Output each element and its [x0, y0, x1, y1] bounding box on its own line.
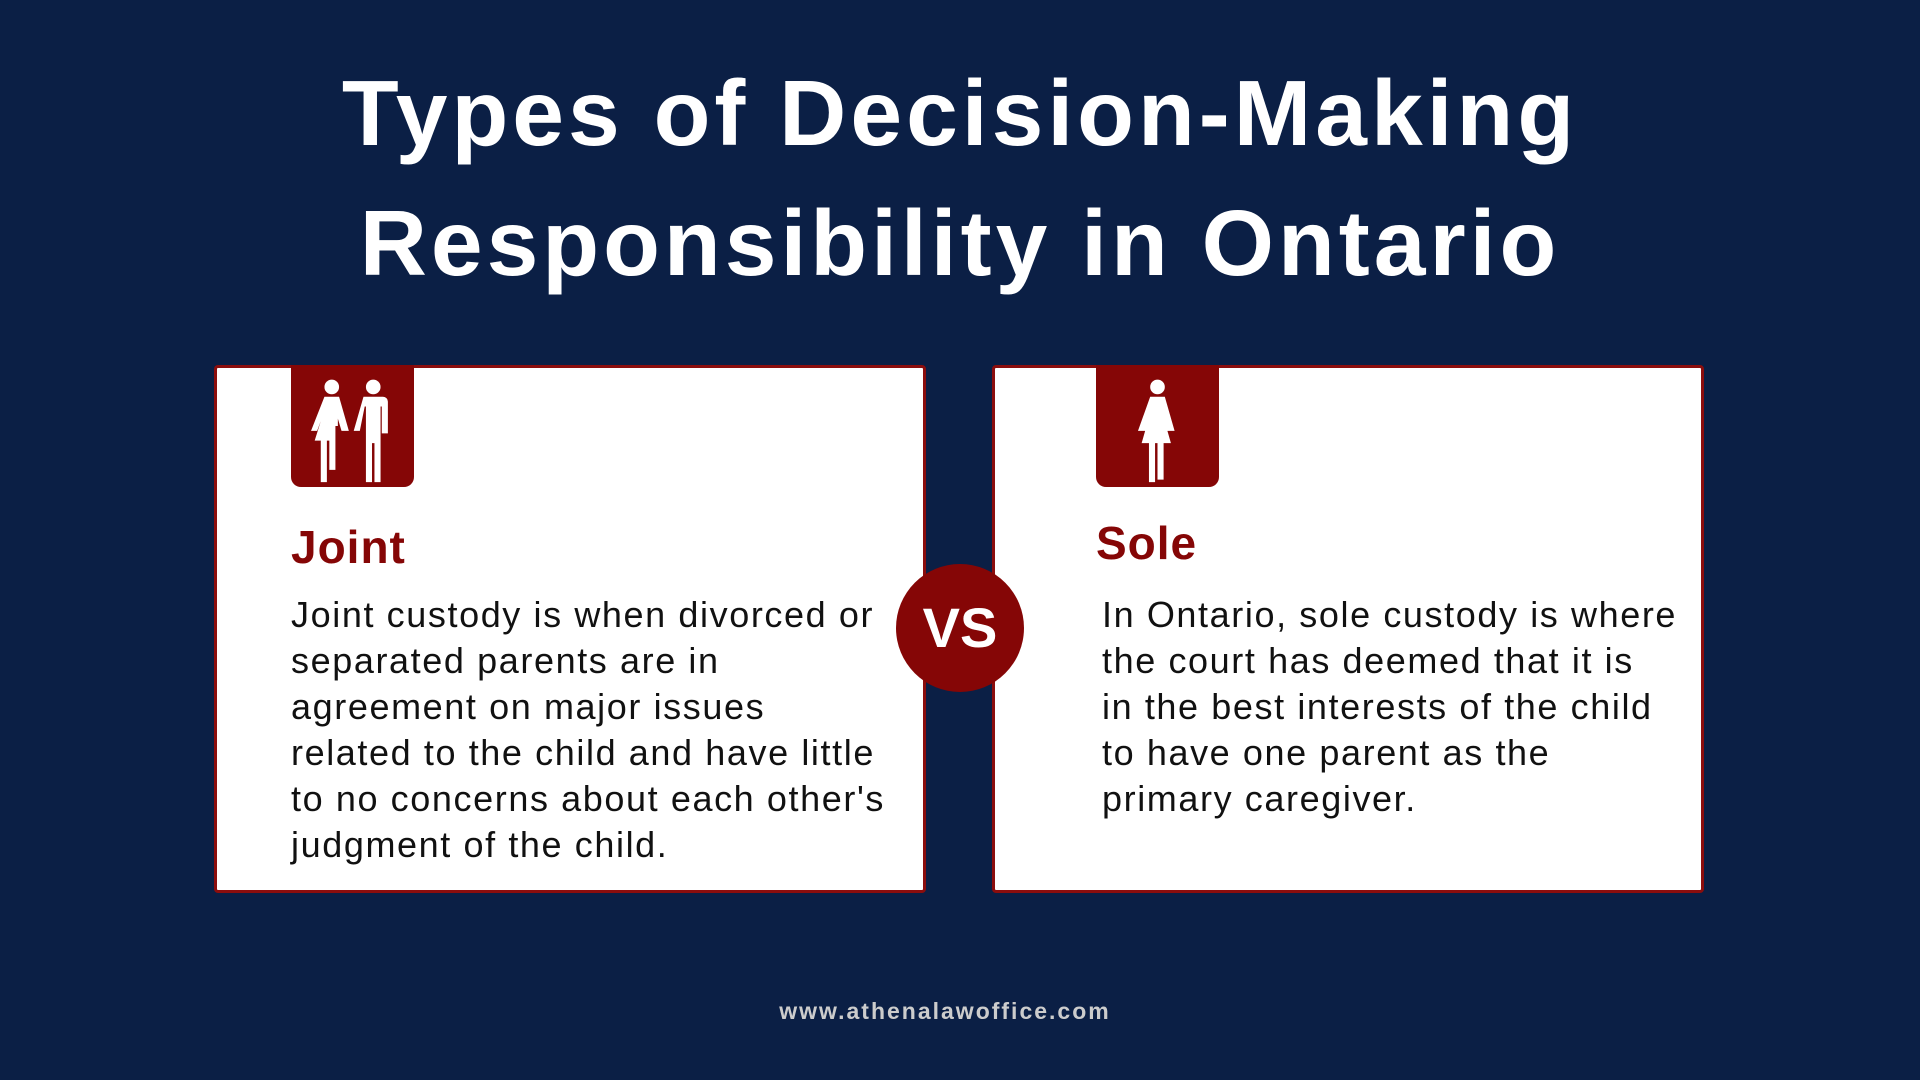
text: joint description: separated parents are in	[291, 640, 720, 681]
panel: joint	[214, 365, 926, 893]
vs badge	[896, 564, 1024, 692]
text: joint description: Joint custody is when divorced or	[291, 594, 874, 635]
title	[342, 61, 1578, 295]
text: joint description: judgment of the child.	[291, 824, 668, 865]
text: sole description	[1102, 594, 1677, 819]
title: Responsibility in Ontario	[360, 191, 1560, 295]
panel: sole	[992, 365, 1704, 893]
text: sole description: primary caregiver.	[1102, 778, 1417, 819]
heading: Joint: Joint	[291, 521, 406, 573]
footer url: www.athenalawoffice.com	[779, 998, 1111, 1024]
title: Types of Decision-Making	[342, 61, 1578, 165]
text: sole description: In Ontario, sole custody is where	[1102, 594, 1677, 635]
heading: Sole: Sole	[1096, 517, 1197, 569]
text: joint description	[290, 594, 885, 865]
text: joint description: agreement on major issues	[291, 686, 765, 727]
icon: two parents	[291, 365, 414, 487]
text: sole description: in the best interests of the child	[1102, 686, 1653, 727]
text: sole description: to have one parent as the	[1102, 732, 1550, 773]
vs badge: VS	[923, 596, 997, 659]
text: joint description: to no concerns about each other's	[291, 778, 885, 819]
text: sole description: the court has deemed that it is	[1102, 640, 1634, 681]
icon: one parent	[1096, 365, 1219, 487]
text: joint description: related to the child and have little	[291, 732, 875, 773]
